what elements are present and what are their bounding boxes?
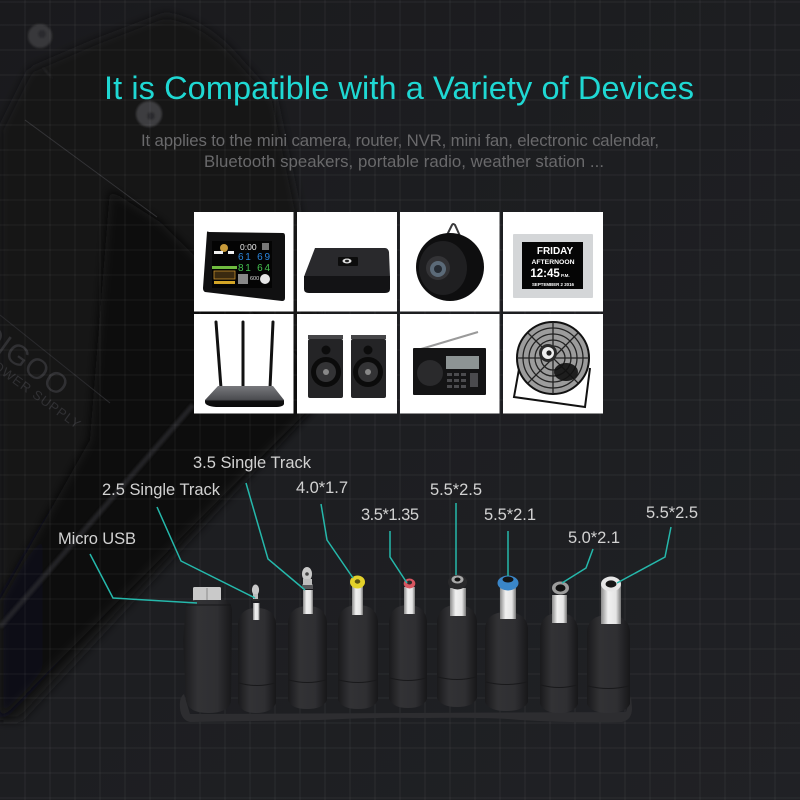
connector labels: 5.5*2.1 bbox=[484, 506, 536, 524]
connector labels: 2.5 Single Track bbox=[102, 481, 221, 499]
tile: weather station: 61 69 bbox=[238, 252, 270, 263]
tile: digital calendar: 12:45 P.M. bbox=[530, 268, 570, 280]
connector labels: 4.0*1.7 bbox=[296, 479, 348, 497]
tile: portable radio bbox=[400, 314, 500, 414]
tip: 5.5*2.1 blue bbox=[485, 576, 528, 711]
tip: 5.5*2.5 bbox=[437, 574, 477, 707]
connector labels: 5.5*2.5 bbox=[646, 504, 698, 522]
tile: weather station: 0:00 bbox=[240, 242, 257, 252]
tile: desk fan bbox=[503, 314, 603, 414]
tile: digital calendar: AFTERNOON bbox=[531, 259, 575, 266]
connector labels: 5.5*2.5 bbox=[430, 481, 482, 499]
subtitle text bbox=[141, 131, 659, 171]
tile: weather station: 600 bbox=[250, 276, 259, 282]
adapter tips bbox=[183, 567, 630, 713]
tile: weather station bbox=[194, 212, 294, 312]
tile: digital calendar: SEPTEMBER 2 2016 bbox=[532, 282, 575, 287]
title: It is Compatible with a Variety of Devices bbox=[104, 70, 694, 106]
connector labels: 5.0*2.1 bbox=[568, 529, 620, 547]
tip: 2.5 single track bbox=[238, 584, 276, 713]
tile: bookshelf speakers bbox=[297, 314, 397, 414]
adapter brand print bbox=[0, 318, 84, 432]
connector labels: 3.5 Single Track bbox=[193, 454, 312, 472]
leader lines bbox=[90, 483, 671, 603]
tip: 5.0*2.1 bbox=[540, 582, 578, 713]
tip: 3.5 single track bbox=[288, 567, 327, 709]
tile: digital calendar bbox=[503, 212, 603, 312]
adapter prongs bbox=[28, 24, 162, 127]
connector labels bbox=[58, 454, 698, 548]
tip: 4.0*1.7 yellow bbox=[338, 576, 378, 709]
tile: digital calendar: FRIDAY bbox=[537, 246, 573, 257]
device photo grid bbox=[194, 212, 603, 414]
tile: wifi router bbox=[194, 314, 294, 414]
tile: mini camera bbox=[400, 212, 500, 312]
tip: micro USB bbox=[183, 587, 232, 713]
tile: NVR box bbox=[297, 212, 397, 312]
connector labels: Micro USB bbox=[58, 530, 136, 548]
subtitle text: It applies to the mini camera, router, NVR, mini fan, electronic calendar, bbox=[141, 131, 659, 150]
adapter tips strap bbox=[180, 694, 632, 722]
subtitle text: Bluetooth speakers, portable radio, weather station ... bbox=[204, 152, 604, 171]
connector labels: 3.5*1.35 bbox=[361, 506, 419, 524]
tip: 3.5*1.35 red bbox=[389, 578, 427, 708]
tip: 5.5*2.5 white bbox=[587, 576, 630, 713]
tile: weather station: 81 64 bbox=[238, 263, 270, 274]
